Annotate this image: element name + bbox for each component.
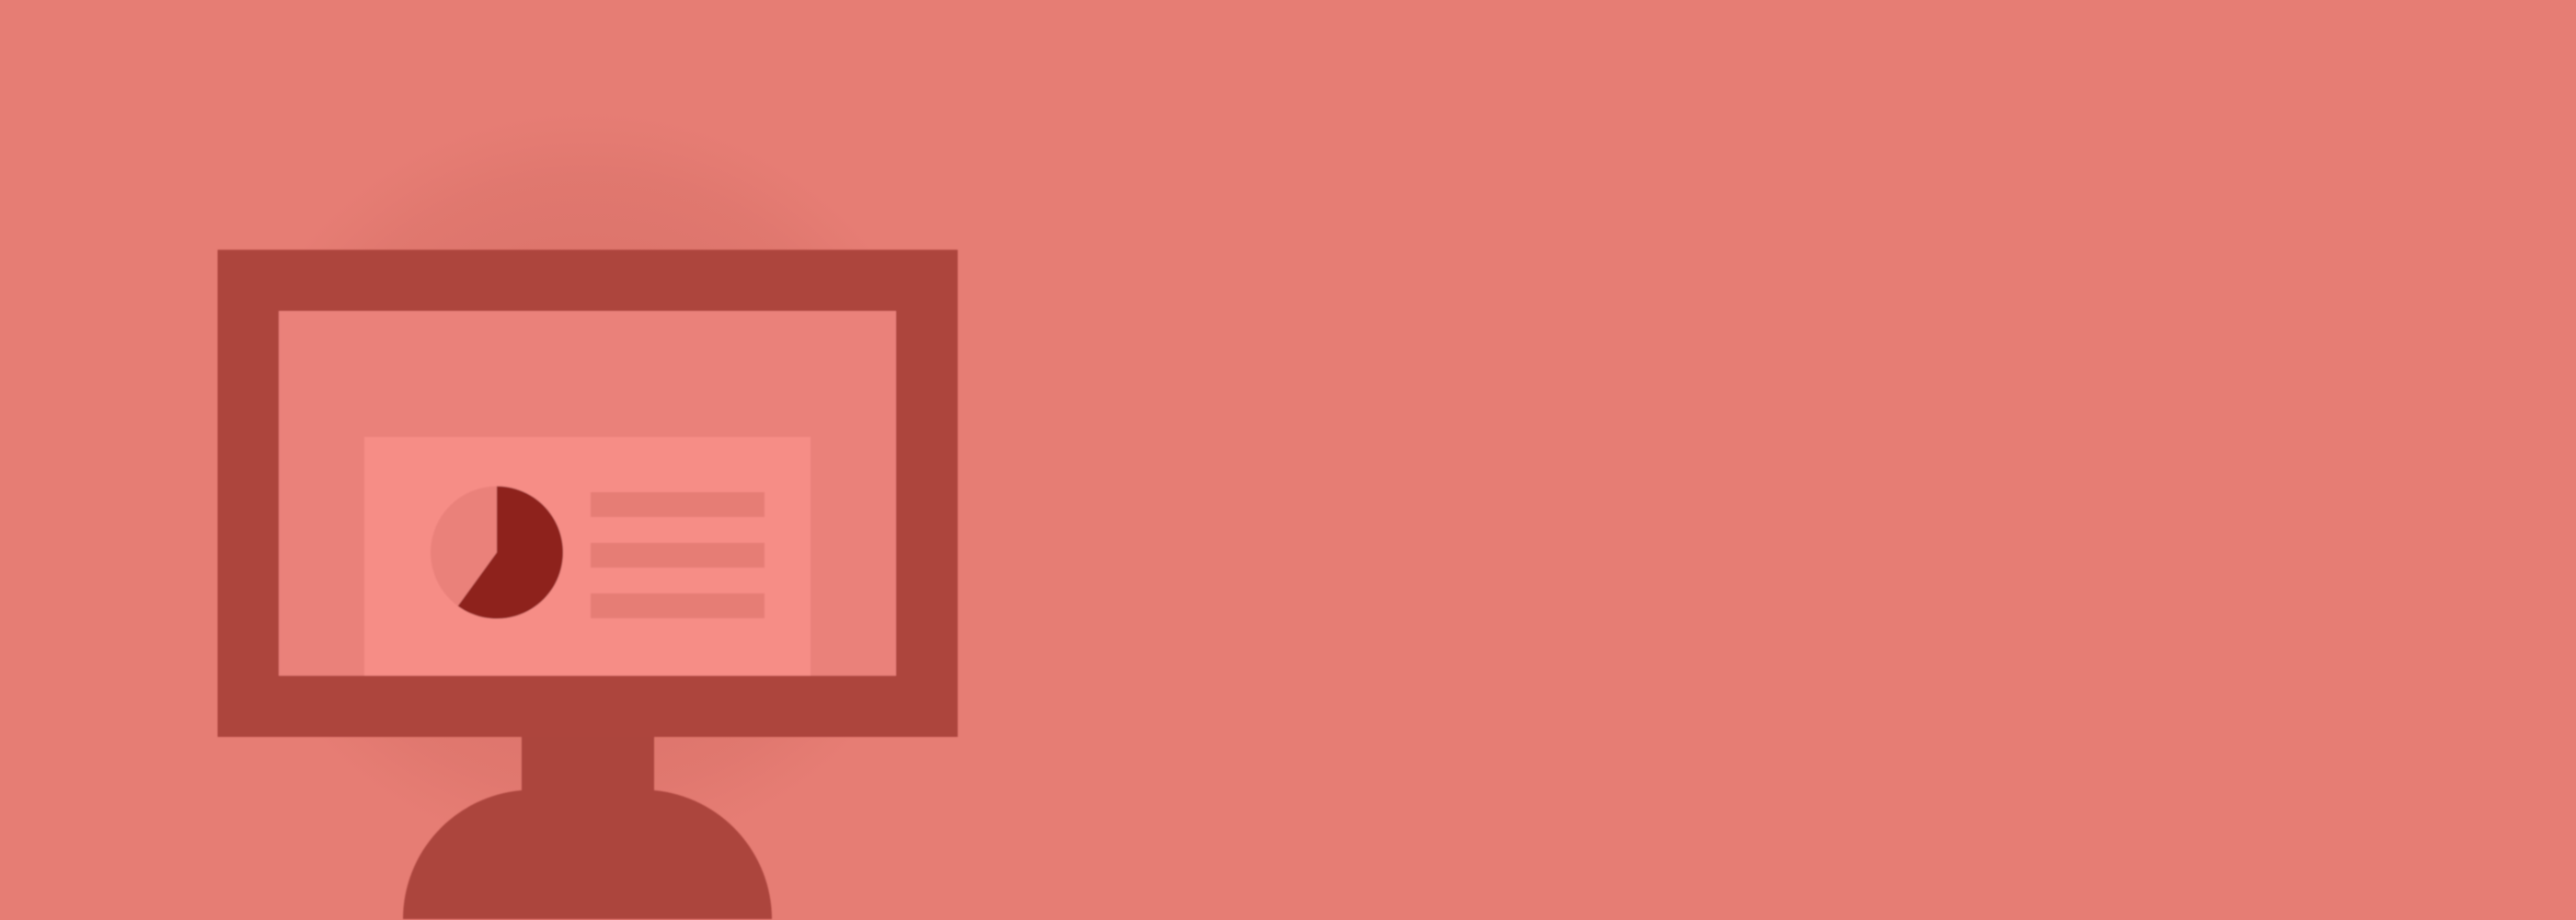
pie light slice xyxy=(431,486,563,618)
monitor stand neck xyxy=(522,727,654,800)
pie dark slice xyxy=(458,486,563,618)
glow behind monitor xyxy=(214,110,960,856)
monitor frame xyxy=(217,250,958,737)
presentation slide xyxy=(364,437,811,675)
monitor stand base xyxy=(403,790,772,919)
pie chart xyxy=(431,486,563,618)
monitor screen xyxy=(279,311,896,675)
slide text lines xyxy=(591,492,765,618)
icon: monitor xyxy=(217,250,958,919)
